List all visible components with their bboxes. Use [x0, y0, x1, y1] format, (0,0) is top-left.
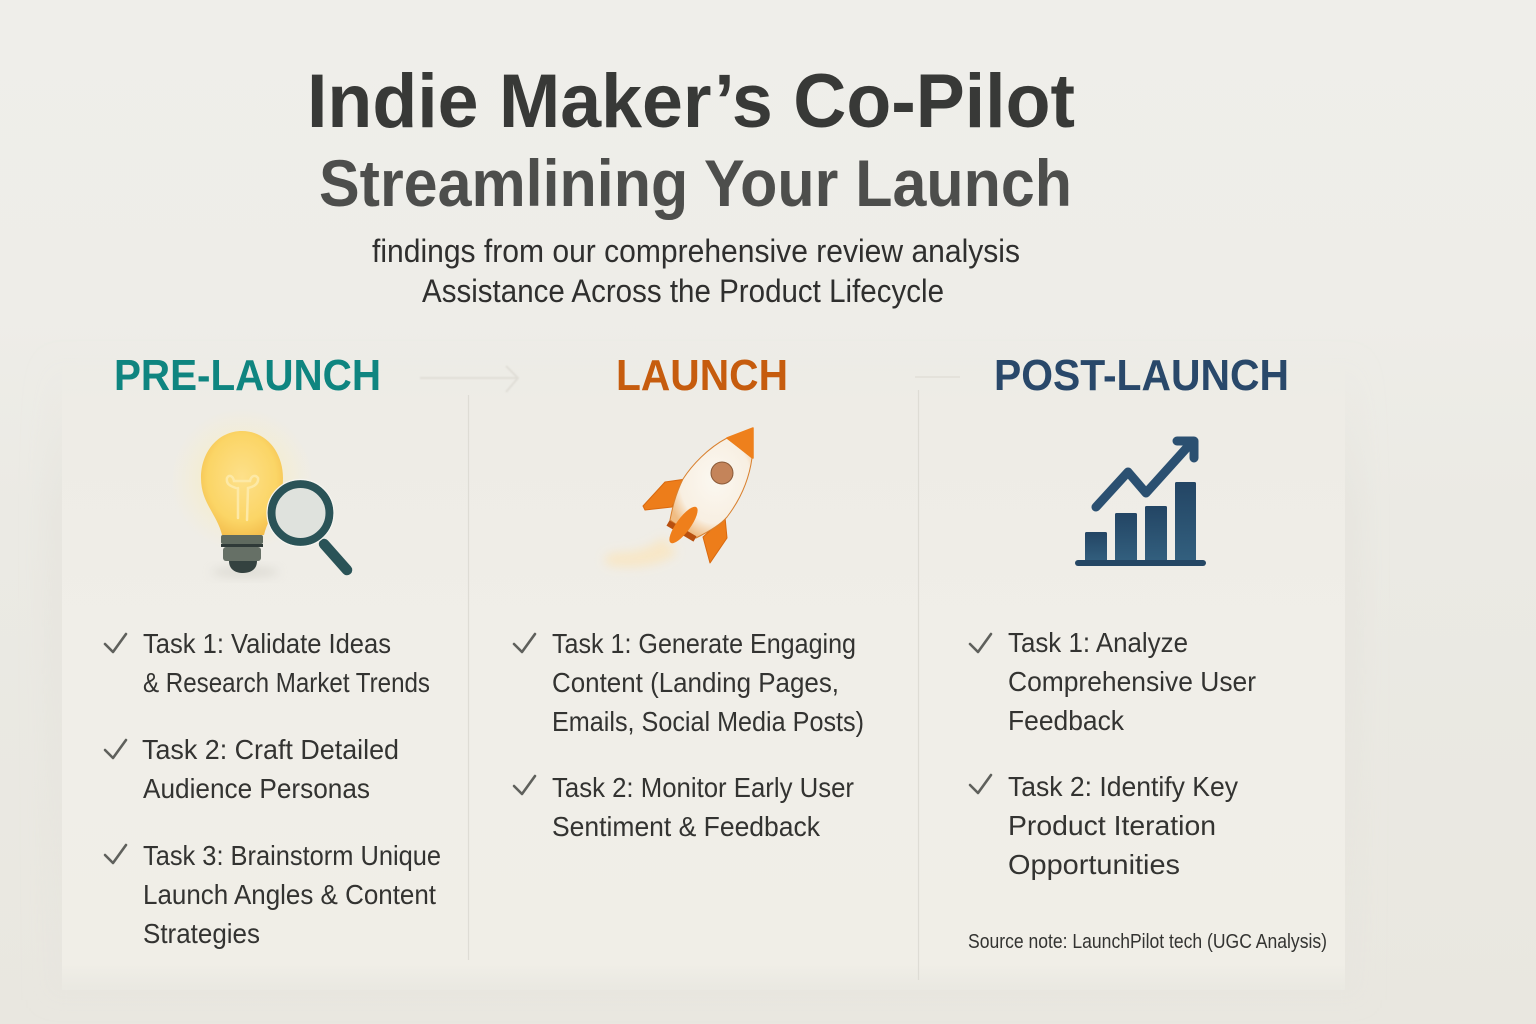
arrow: pre-launch to launch — [420, 366, 518, 392]
heading: post-launch: POST-LAUNCH — [994, 351, 1289, 400]
description text: findings from our comprehensive review analysis — [372, 233, 1020, 269]
checklist: post-launch tasks — [970, 627, 1256, 880]
task 1: & Research Market Trends — [143, 667, 430, 698]
task 2: Opportunities — [1008, 849, 1180, 880]
task 1: Task 1: Generate Engaging — [552, 628, 856, 659]
description text: Assistance Across the Product Lifecycle — [422, 273, 944, 309]
task 3: Task 3: Brainstorm Unique — [143, 840, 441, 871]
title: Indie Maker’s Co-Pilot — [307, 59, 1075, 144]
task 2: Audience Personas — [143, 773, 370, 804]
checklist: launch tasks — [514, 628, 864, 842]
task 1: Content (Landing Pages, — [552, 667, 839, 698]
task 2: Task 2: Craft Detailed — [142, 734, 399, 765]
task 2: Task 2: Identify Key — [1008, 771, 1238, 802]
task 3 — [105, 840, 441, 949]
task 2: Sentiment & Feedback — [552, 811, 821, 842]
arrow: launch to post-launch — [915, 376, 960, 378]
subtitle heading: Streamlining Your Launch — [319, 146, 1072, 220]
task 2 — [105, 734, 399, 804]
task 1: Feedback — [1008, 705, 1125, 736]
task 2 — [514, 772, 854, 842]
source note: Source note: LaunchPilot tech (UGC Analysis) — [968, 930, 1327, 953]
heading: pre-launch: PRE-LAUNCH — [114, 351, 381, 400]
task 1: Task 1: Analyze — [1008, 627, 1188, 658]
task 3: Launch Angles & Content — [143, 879, 436, 910]
icon: growth chart — [1078, 441, 1203, 563]
task 2 — [970, 771, 1238, 880]
task 1: Emails, Social Media Posts) — [552, 706, 864, 737]
icon: light bulb and magnifier — [170, 408, 347, 577]
task 1: Task 1: Validate Ideas — [143, 628, 391, 659]
task 1 — [970, 627, 1256, 736]
icon: rocket — [605, 428, 753, 567]
panel: lifecycle card — [44, 350, 1364, 1000]
heading: launch: LAUNCH — [616, 351, 788, 400]
task 1 — [105, 628, 430, 698]
task 2: Product Iteration — [1008, 810, 1216, 841]
task 3: Strategies — [143, 918, 260, 949]
task 1: Comprehensive User — [1008, 666, 1256, 697]
description text — [372, 233, 1020, 309]
task 1 — [514, 628, 864, 737]
task 2: Task 2: Monitor Early User — [552, 772, 854, 803]
checklist: pre-launch tasks — [105, 628, 441, 949]
